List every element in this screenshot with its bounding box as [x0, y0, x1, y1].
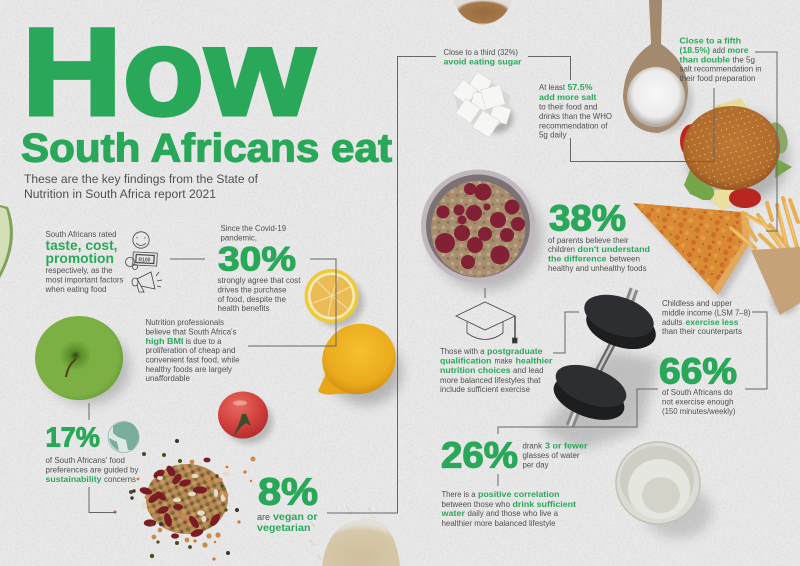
text: taste, cost, promotion: respectively, as the [46, 266, 113, 275]
text: exercise less: Childless and upper [662, 299, 732, 308]
text: close to a fifth: (18.5%) [680, 45, 710, 55]
stat: 8% vegan or vegetarian: vegan or [273, 512, 318, 523]
icon: globe [108, 422, 139, 452]
stat: 38% parents: 38% [549, 198, 626, 238]
text: postgraduate qualification: more balanced lifestyles that [440, 376, 541, 385]
photo: wooden spoon with salt [623, 0, 693, 133]
text: close to a fifth: add [712, 46, 725, 55]
stat: 30% cost: of food, despite the [218, 295, 287, 304]
stat: 17% sustainability: preferences are guided by [46, 466, 138, 474]
photo: brown sugar [454, 0, 512, 25]
photo: beans and lentils [113, 439, 256, 561]
text: high BMI: unaffordable [146, 374, 191, 383]
subtitle [24, 172, 259, 201]
text: high BMI: healthy foods are largely [146, 365, 232, 374]
stat: 17% sustainability: 17% [46, 422, 100, 452]
text: positive correlation: water [440, 508, 466, 518]
stat: 38% parents [548, 198, 650, 273]
photo: cucumber slice [0, 205, 13, 278]
text: postgraduate qualification: make [494, 356, 513, 366]
stat: 26% water: 3 or fewer [545, 440, 588, 450]
text: avoid eating sugar [444, 48, 522, 66]
text: exercise less [662, 299, 751, 336]
icon: megaphone [132, 272, 162, 292]
text: close to a fifth: than double [680, 54, 730, 64]
photo: glass of water [616, 442, 712, 538]
stat: 30% cost [218, 224, 301, 313]
text: positive correlation: healthier more balanced lifestyle [442, 519, 556, 528]
text: add more salt: to their food and [539, 102, 598, 112]
text: close to a fifth: their food preparation [680, 74, 756, 83]
icon: banknote and coin: R100 [138, 258, 151, 264]
stat: 66% exercise: 66% [659, 350, 737, 392]
icon: graduation cap [456, 302, 517, 343]
stat: 30% cost: strongly agree that cost [218, 276, 301, 285]
stat: 17% sustainability: of South Africans' food [46, 456, 125, 465]
text: high BMI: high BMI [146, 336, 184, 346]
text: exercise less: adults [662, 318, 682, 327]
title: H [22, 4, 122, 142]
text: close to a fifth: the 5g [732, 56, 755, 64]
text: exercise less: than their counterparts [662, 327, 742, 336]
subtitle: Nutrition in South Africa report 2021 [24, 187, 216, 201]
stat: 66% exercise: (150 minutes/weekly) [662, 407, 736, 416]
text: high BMI: Nutrition professionals [146, 318, 224, 327]
stat: 38% parents: healthy and unhealthy foods [548, 264, 646, 273]
stat: 30% cost: 30% [218, 240, 296, 278]
photo: green apple [35, 316, 130, 404]
text: positive correlation [440, 489, 576, 528]
text: taste, cost, promotion: taste, cost, [46, 238, 118, 253]
text: positive correlation: positive correlation [478, 489, 560, 499]
text: taste, cost, promotion: when eating food [44, 285, 106, 294]
stat: 66% exercise [659, 350, 737, 416]
text: add more salt [539, 82, 612, 140]
stat: 30% cost: drives the purchase [218, 286, 287, 294]
text: add more salt: 5g daily [539, 130, 566, 140]
stat: 26% water: 26% [441, 434, 518, 476]
photo: french fries in paper box [731, 198, 800, 315]
photo: tomato [218, 392, 273, 444]
text: high BMI: proliferation of cheap and [146, 346, 236, 355]
text: close to a fifth: Close to a fifth [680, 36, 741, 46]
subtitle: These are the key findings from the State of [24, 172, 259, 186]
stat: 66% exercise: of South Africans do [662, 388, 733, 397]
text: taste, cost, promotion: South Africans rated [46, 230, 116, 239]
text: postgraduate qualification: and lead [513, 366, 544, 375]
stat: 17% sustainability: concerns [104, 475, 136, 484]
stat: 38% parents: don't understand [578, 244, 650, 254]
icon: smiley face [133, 232, 149, 248]
text: avoid eating sugar: Close to a third (32%) [444, 48, 518, 57]
text: add more salt: At least [539, 83, 566, 92]
stat: 26% water: per day [522, 460, 548, 470]
text: positive correlation: drink sufficient [512, 499, 576, 509]
photo: pizza slice [633, 203, 752, 300]
stat: 26% water: glasses of water [522, 451, 580, 460]
stat: 8% vegan or vegetarian [257, 472, 318, 534]
text: close to a fifth: more [728, 45, 749, 55]
text: positive correlation: There is a [442, 490, 476, 499]
title: South Africans eat [21, 126, 392, 170]
text: postgraduate qualification: healthier [516, 356, 553, 366]
text: positive correlation: between those who [442, 500, 511, 509]
text: high BMI: is due to a [186, 337, 222, 346]
text: high BMI: convenient fast food, while [146, 356, 240, 364]
stat: 30% cost: pandemic, [220, 234, 257, 242]
text: close to a fifth [680, 36, 762, 83]
text: postgraduate qualification: include sufficient exercise [440, 385, 531, 394]
connector lines [89, 52, 777, 513]
photo: sugar cubes [452, 72, 513, 138]
stat: 8% vegan or vegetarian: 8% [258, 472, 318, 514]
stat: 8% vegan or vegetarian: are [257, 512, 270, 523]
text: add more salt: recommendation of [539, 122, 608, 130]
title [21, 4, 392, 170]
text: avoid eating sugar: avoid eating sugar [444, 56, 522, 66]
stat: 38% parents: between [610, 254, 640, 264]
text: exercise less: exercise less [686, 317, 739, 327]
title: o [123, 4, 204, 142]
text: taste, cost, promotion: most important factors [46, 276, 124, 284]
text: exercise less: middle income (LSM 7–8) [662, 308, 751, 318]
photo: whole lemon [312, 313, 406, 405]
stat: 38% parents: of parents believe their [548, 236, 629, 245]
text: postgraduate qualification [440, 346, 553, 394]
photo: rice pile [310, 505, 400, 566]
text: close to a fifth: salt recommendation in [680, 64, 762, 74]
stat: 8% vegan or vegetarian: vegetarian [257, 523, 310, 534]
text: taste, cost, promotion: promotion [46, 251, 114, 266]
stat: 38% parents: children [548, 245, 575, 254]
text: postgraduate qualification: Those with a [440, 347, 485, 356]
text: add more salt: drinks than the WHO [539, 112, 612, 121]
stat: 30% cost: health benefits [218, 304, 270, 313]
stat: 17% sustainability [46, 422, 138, 484]
text: add more salt: 57.5% [568, 82, 593, 92]
text: taste, cost, promotion [44, 230, 123, 294]
stat: 26% water [441, 434, 588, 476]
stat: 17% sustainability: sustainability [46, 474, 102, 484]
text: postgraduate qualification: nutrition choices [440, 365, 511, 375]
title: w [204, 4, 315, 142]
photo: halved lemon [304, 269, 364, 327]
stat: 38% parents: the difference [548, 254, 607, 264]
stat: 66% exercise: not exercise enough [662, 398, 734, 406]
stat: 30% cost: Since the Covid-19 [220, 224, 287, 233]
stat: 26% water: drank [522, 442, 543, 450]
photo: burger [680, 98, 792, 211]
text: add more salt: add more salt [539, 92, 597, 102]
text: postgraduate qualification: qualification [440, 356, 492, 366]
text: positive correlation: daily and those who live a [468, 509, 559, 518]
icon: banknote and coin [126, 252, 157, 270]
photo: cereal bowl with raspberries [421, 170, 542, 290]
text: high BMI: believe that South Africa's [146, 328, 236, 336]
text: postgraduate qualification: postgraduate [487, 346, 543, 356]
photo: dumbbell [540, 287, 661, 450]
text: high BMI [146, 318, 240, 383]
